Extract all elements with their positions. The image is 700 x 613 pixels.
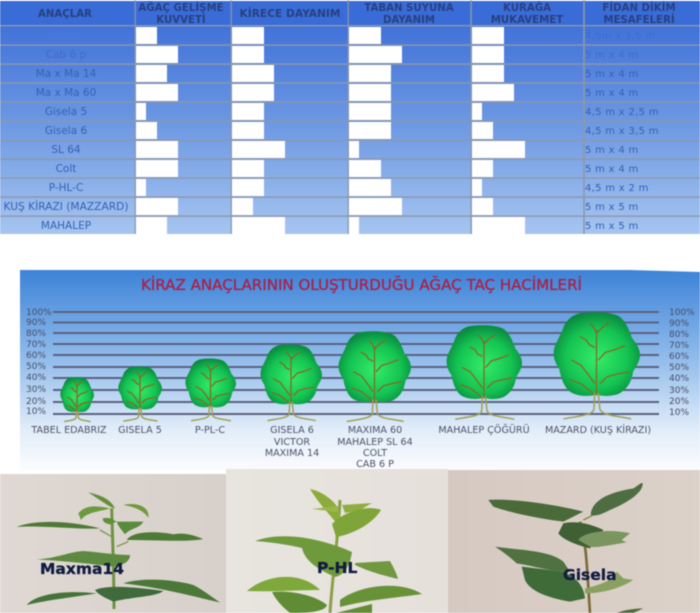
left percent axis: 60%: [26, 351, 46, 361]
tree: Maxima 60, Mahalep SL 64, Colt, Cab 6 P: [337, 331, 413, 470]
table panel: rootstock properties: [0, 0, 700, 234]
table header row: [0, 0, 700, 26]
row: Gisela 5: Gisela 5: [45, 106, 87, 118]
row: Ma x Ma 14: [36, 65, 639, 82]
row: Gisela 5: [45, 103, 659, 120]
left percent axis: 10%: [26, 407, 46, 417]
row: SL 64: 5 m x 4 m: [585, 145, 639, 156]
tree: Maxima 60, Mahalep SL 64, Colt, Cab 6 P: MAHALEP SL 64: [337, 437, 413, 448]
photo: P-HL seedling: [226, 469, 448, 613]
row: SL 64: SL 64: [51, 144, 81, 156]
row: Gisela 6: [45, 122, 659, 139]
photo: Maxma14 seedling: [0, 474, 226, 613]
table header row: MUKAVEMET: [491, 15, 563, 26]
row: Ma x Ma 60: 5 m x 4 m: [585, 88, 639, 99]
label: P-HL: P-HL: [317, 559, 357, 577]
row: Ma x Ma 14: Ma x Ma 14: [36, 68, 97, 80]
right percent axis: 70%: [669, 341, 689, 351]
right percent axis: [669, 308, 695, 418]
row: Colt: 5 m x 4 m: [585, 164, 639, 175]
row: Kuş Kirazı: 5 m x 5 m: [585, 202, 639, 213]
chart title: KİRAZ ANAÇLARININ OLUŞTURDUĞU AĞAÇ TAÇ HACİMLERİ: [141, 275, 582, 294]
row: P-HL-C: 4,5 m x 2 m: [585, 183, 649, 194]
tree: Mazard: MAZARD (KUŞ KİRAZI): [545, 423, 651, 436]
tree: P-PL-C: P-PL-C: [195, 425, 225, 436]
row: Gisela 6: 4,5 m x 3,5 m: [585, 126, 659, 137]
row: Mahalep: [41, 217, 639, 234]
table header row: MESAFELERİ: [603, 12, 675, 26]
tree: Tabel Edabriz: TABEL EDABRIZ: [30, 425, 107, 436]
left percent axis: 70%: [26, 340, 46, 350]
row: P-HL-C: [49, 179, 649, 196]
row: Gisela 6: Gisela 6: [45, 125, 87, 137]
row: Mahalep: 5 m x 5 m: [585, 221, 639, 232]
label: Gisela: Gisela: [563, 566, 617, 584]
right percent axis: 40%: [669, 374, 689, 384]
tree: Maxima 60, Mahalep SL 64, Colt, Cab 6 P: CAB 6 P: [356, 459, 394, 470]
tree: Mahalep Çöğürü: MAHALEP ÇÖĞÜRÜ: [438, 423, 530, 436]
tree: Mahalep Çöğürü: [438, 325, 530, 436]
row: Colt: Colt: [56, 163, 76, 175]
table header row: AĞAÇ GELİŞME: [138, 0, 224, 14]
left percent axis: 20%: [26, 397, 46, 407]
table header row: FİDAN DİKİM: [602, 0, 676, 14]
right percent axis: 20%: [669, 397, 689, 407]
table header row: TABAN SUYUNA: [364, 3, 454, 14]
left percent axis: 100%: [26, 308, 52, 318]
left percent axis: 90%: [26, 318, 46, 328]
row: Cab 6 p: [46, 46, 639, 63]
row: Kuş Kirazı: [4, 198, 639, 215]
tree: Gisela 6, Victor, Maxima 14: MAXIMA 14: [265, 448, 319, 459]
left percent axis: 40%: [26, 373, 46, 383]
row: P-HL-C: P-HL-C: [49, 182, 83, 194]
table header row: ANAÇLAR: [38, 9, 92, 20]
right percent axis: 90%: [669, 319, 689, 329]
tree: Gisela 6, Victor, Maxima 14: GISELA 6: [270, 425, 314, 436]
photo: Gisela seedling: [448, 470, 700, 613]
row: Ma x Ma 14: 5 m x 4 m: [585, 69, 639, 80]
left percent axis: 80%: [26, 329, 46, 339]
row: Victor: Victor: [51, 30, 82, 42]
right percent axis: 80%: [669, 330, 689, 340]
table header row: KURAĞA: [503, 1, 551, 14]
row: Cab 6 p: Cab 6 p: [46, 49, 87, 61]
left percent axis: 30%: [26, 385, 46, 395]
tree: Gisela 5: GISELA 5: [118, 425, 162, 436]
right percent axis: 60%: [669, 352, 689, 362]
row: Victor: [51, 27, 655, 44]
tree: Maxima 60, Mahalep SL 64, Colt, Cab 6 P: COLT: [363, 448, 387, 459]
tree: Gisela 6, Victor, Maxima 14: VICTOR: [274, 437, 310, 448]
row: Gisela 5: 4,5 m x 2,5 m: [585, 107, 659, 118]
table header row: DAYANIM: [383, 15, 435, 26]
table background: [0, 1, 700, 234]
row: Kuş Kirazı: KUŞ KİRAZI (MAZZARD): [4, 200, 128, 213]
table header row: KUVVETİ: [156, 12, 206, 26]
row: Ma x Ma 60: [36, 84, 639, 101]
tree: Gisela 5: [118, 367, 162, 436]
chart background: [20, 270, 700, 470]
chart panel: tree crown volumes: [20, 270, 700, 470]
label: Maxma14: Maxma14: [40, 560, 124, 578]
tree: Gisela 6, Victor, Maxima 14: [260, 344, 322, 459]
tree: P-PL-C: [185, 358, 236, 436]
left percent axis: 50%: [26, 362, 46, 372]
row: SL 64: [51, 141, 639, 158]
row: Cab 6 p: 5 m x 4 m: [585, 50, 639, 61]
row: Colt: [56, 160, 639, 177]
row: Victor: 4,5m x 3,5 m: [585, 31, 655, 42]
row: Mahalep: MAHALEP: [41, 220, 91, 232]
right percent axis: 30%: [669, 386, 689, 396]
left percent axis: [26, 308, 52, 417]
tree: Tabel Edabriz: [30, 377, 107, 436]
row: Ma x Ma 60: Ma x Ma 60: [36, 87, 96, 99]
table header row: KİRECE DAYANIM: [240, 6, 340, 20]
right percent axis: 100%: [669, 308, 695, 318]
tree: Maxima 60, Mahalep SL 64, Colt, Cab 6 P: MAXIMA 60: [348, 425, 402, 436]
right percent axis: 50%: [669, 363, 689, 373]
right percent axis: 10%: [669, 408, 689, 418]
tree: Mazard: [545, 312, 651, 436]
